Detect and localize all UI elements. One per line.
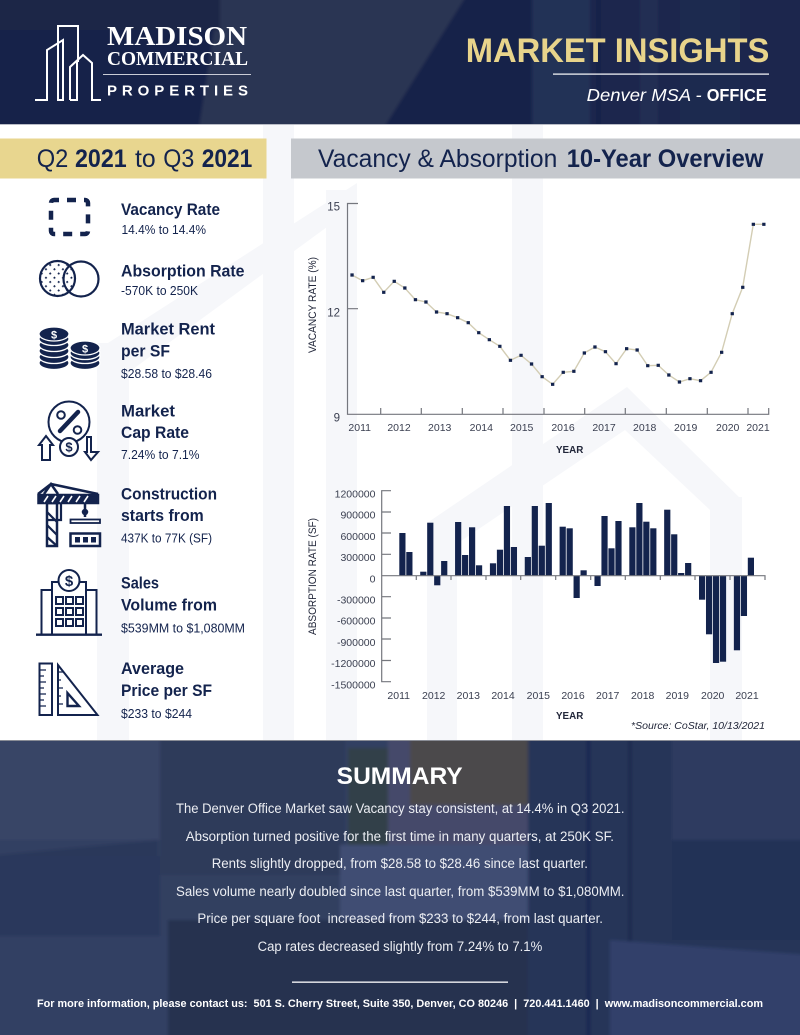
sales volume text: Volume from	[121, 596, 217, 615]
vacancy y labels	[327, 202, 340, 424]
market rent text: Market Rent	[121, 319, 215, 338]
sales volume text	[121, 574, 245, 635]
heading band: overview	[291, 138, 800, 178]
summary text: The Denver Office Market saw Vacancy stay consistent, at 14.4% in Q3 2021.	[176, 801, 624, 816]
summary text: Sales volume nearly doubled since last quarter, from $539MM to $1,080MM.	[176, 884, 624, 899]
market rent text	[121, 319, 215, 381]
heading band: period: to	[135, 145, 156, 173]
market rent text: per SF	[121, 342, 170, 361]
absorption x labels: 2014	[491, 690, 515, 702]
construction text: starts from	[121, 506, 204, 525]
metric: market cap rate	[39, 402, 200, 462]
vacancy x labels: 2011	[348, 422, 371, 434]
absorption y labels: 1200000	[335, 489, 376, 501]
bar chart axes	[382, 491, 765, 682]
market rent text: $28.58 to $28.46	[121, 367, 212, 381]
absorption x labels: 2012	[422, 690, 446, 702]
summary panel	[0, 730, 800, 1035]
absorption y labels: 600000	[340, 531, 376, 543]
heading band: period: Q2	[37, 145, 68, 173]
icon: dashed square	[51, 200, 88, 234]
metric: construction starts	[38, 484, 217, 546]
absorption x labels: 2019	[666, 690, 689, 702]
absorption x labels: 2015	[527, 690, 550, 702]
absorption text	[121, 262, 244, 298]
absorption x labels: 2021	[735, 690, 759, 702]
absorption text: Absorption Rate	[121, 262, 244, 281]
vacancy text	[121, 200, 220, 237]
metric: vacancy rate	[51, 200, 220, 237]
vacancy x labels: 2016	[551, 422, 575, 434]
average price text	[121, 659, 212, 721]
source note: *Source: CoStar, 10/13/2021	[631, 720, 765, 732]
absorption y labels: -900000	[337, 637, 376, 649]
absorption x labels: 2011	[387, 690, 410, 702]
title: market insights: MARKET INSIGHTS	[466, 32, 769, 70]
icon: bank building	[36, 570, 102, 635]
bar chart bars	[399, 503, 754, 663]
metric: market rent: $	[82, 344, 88, 356]
construction text	[121, 484, 217, 546]
vacancy x labels: 2013	[428, 422, 452, 434]
average price text: Price per SF	[121, 681, 212, 700]
subtitle	[587, 85, 767, 105]
absorption x labels: 2017	[596, 690, 620, 702]
heading band: overview: Vacancy & Absorption	[318, 145, 557, 173]
footer contact line: For more information, please contact us: 501 S. Cherry Street, Suite 350, Denver, CO 80246 | 720.441.1460 | www.madisoncommercial.com	[37, 998, 763, 1010]
bar chart: absorption rate	[307, 489, 765, 732]
vacancy x labels: 2015	[510, 422, 534, 434]
absorption y labels: -1500000	[331, 679, 376, 691]
heading band: overview: 10-Year Overview	[567, 145, 764, 173]
vacancy text: 14.4% to 14.4%	[122, 223, 206, 237]
sales volume text: $539MM to $1,080MM	[121, 621, 245, 635]
absorption y labels: -600000	[337, 616, 376, 628]
icon: crane	[38, 484, 100, 546]
absorption x labels: 2018	[631, 690, 655, 702]
market cap text: 7.24% to 7.1%	[121, 448, 200, 462]
metric: sales volume: $	[65, 573, 74, 590]
vacancy x labels: 2019	[674, 422, 698, 434]
vacancy x labels: 2021	[746, 422, 770, 434]
vacancy data markers	[352, 224, 764, 384]
logo icon: city buildings	[35, 26, 101, 100]
absorption y labels: 0	[370, 574, 376, 586]
absorption x labels: 2016	[561, 690, 585, 702]
absorption y labels: -1200000	[331, 658, 376, 670]
vacancy x labels: 2018	[633, 422, 657, 434]
vacancy y labels: 9	[334, 412, 340, 424]
absorption x labels	[387, 690, 759, 702]
metric: market rent: $	[51, 330, 57, 342]
summary text	[176, 801, 624, 954]
line chart: vacancy rate	[307, 202, 770, 456]
subtitle: Denver MSA -	[587, 85, 702, 105]
icon: overlapping circles	[40, 261, 98, 296]
construction text: 437K to 77K (SF)	[121, 532, 212, 546]
logo wordmark	[103, 21, 251, 100]
logo wordmark: MADISON	[107, 21, 248, 51]
vacancy y labels: 12	[327, 308, 340, 320]
vacancy x labels: 2017	[592, 422, 616, 434]
absorption x labels: 2020	[701, 690, 725, 702]
average price text: $233 to $244	[121, 707, 192, 721]
icon: coin stacks	[39, 327, 100, 370]
heading band: period: Q3	[163, 145, 194, 173]
vacancy x labels	[348, 422, 770, 434]
construction text: Construction	[121, 484, 217, 503]
icon: percent circle with arrows	[39, 402, 98, 460]
vacancy x labels: 2014	[470, 422, 493, 434]
line chart axes	[348, 204, 769, 414]
icon: ruler and set square	[40, 664, 98, 715]
absorption axis title: ABSORPTION RATE (SF)	[307, 518, 319, 635]
absorption text: -570K to 250K	[121, 284, 199, 298]
logo wordmark: COMMERCIAL	[107, 48, 248, 70]
absorption y labels: -300000	[337, 595, 376, 607]
logo wordmark: PROPERTIES	[107, 83, 248, 100]
heading band: period	[0, 138, 266, 178]
subtitle: OFFICE	[707, 85, 767, 105]
heading band: period: 2021	[202, 145, 252, 173]
metric: market cap rate: $	[65, 440, 73, 454]
vacancy x labels: 2012	[387, 422, 411, 434]
metric: average price	[40, 659, 212, 721]
absorption y labels	[331, 489, 376, 691]
vacancy axis title: VACANCY RATE (%)	[307, 257, 319, 353]
market cap text: Cap Rate	[121, 423, 189, 442]
summary text: Price per square foot increased from $233 to $244, from last quarter.	[197, 911, 603, 926]
vacancy data line	[352, 224, 764, 384]
metric: market rent	[39, 319, 215, 381]
market cap text: Market	[121, 402, 175, 421]
vacancy text: Vacancy Rate	[121, 200, 220, 219]
absorption y labels: 300000	[340, 552, 376, 564]
vacancy x title: YEAR	[556, 444, 584, 456]
heading band: period: 2021	[75, 145, 127, 173]
absorption x title: YEAR	[556, 710, 584, 722]
logo	[35, 21, 251, 100]
absorption x labels: 2013	[457, 690, 480, 702]
summary text: Rents slightly dropped, from $28.58 to $28.46 since last quarter.	[212, 856, 588, 871]
header banner	[0, 0, 800, 134]
metric: absorption rate	[40, 261, 244, 298]
average price text: Average	[121, 659, 184, 678]
vacancy y labels: 15	[327, 202, 340, 214]
market cap text	[121, 402, 200, 462]
summary heading: SUMMARY	[337, 763, 463, 790]
vacancy x labels: 2020	[716, 422, 740, 434]
sales volume text: Sales	[121, 574, 159, 593]
summary text: Cap rates decreased slightly from 7.24% to 7.1%	[258, 939, 542, 954]
absorption y labels: 900000	[340, 510, 376, 522]
metric: sales volume	[36, 570, 245, 635]
summary text: Absorption turned positive for the first time in many quarters, at 250K SF.	[186, 829, 614, 844]
